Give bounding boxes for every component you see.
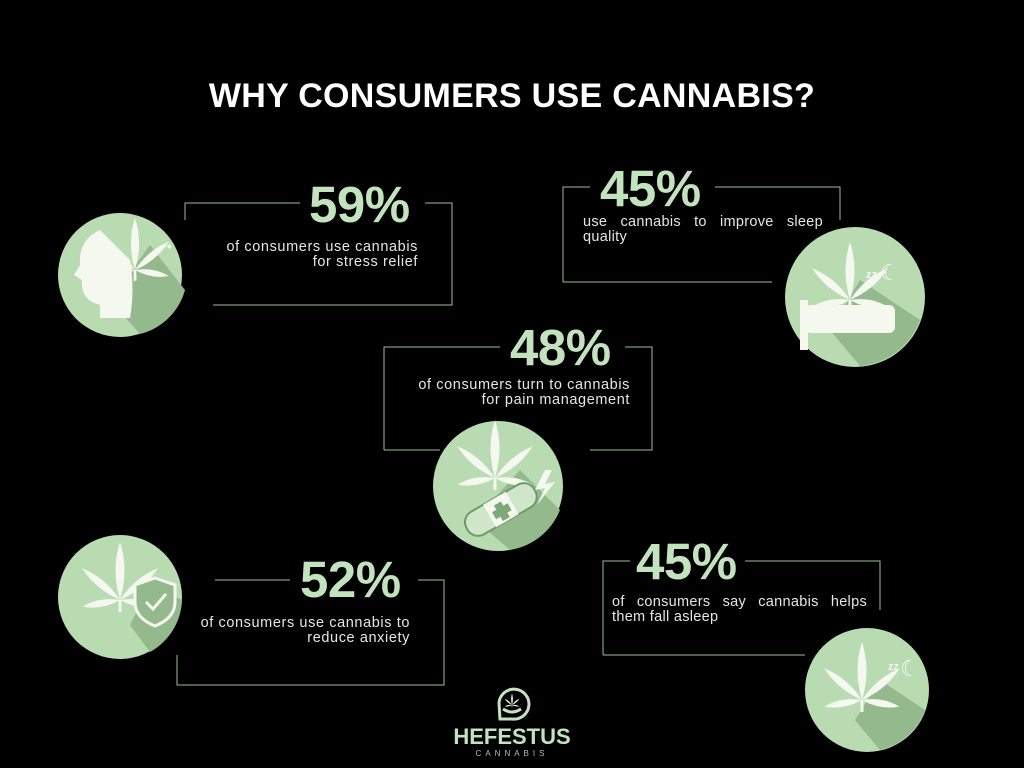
text: pain management [418, 377, 630, 408]
icon: stress relief circle: ✦ [95, 237, 108, 254]
icon: sleep circle: ☾ [880, 260, 900, 285]
text: fall asleep: of consumers say cannabis helps them fall asleep [612, 594, 867, 625]
text: pain management: of consumers turn to cannabis [418, 377, 630, 393]
logo: CANNABIS [476, 749, 548, 758]
stat 45% sleep quality: 45% [600, 160, 701, 217]
logo: HEFESTUS [453, 724, 571, 749]
text: stress relief: for stress relief [313, 254, 418, 270]
icon: sleep circle: zz [866, 269, 878, 281]
stat 59%: 59% [309, 176, 410, 233]
text: stress relief: of consumers use cannabis [226, 239, 418, 255]
text: anxiety: reduce anxiety [307, 630, 410, 646]
stat 52%: 52% [300, 551, 401, 608]
text: pain management: for pain management [482, 392, 630, 408]
icon: stress relief circle: ✦ [165, 242, 173, 253]
text: anxiety: of consumers use cannabis to [201, 615, 410, 631]
icon: fall asleep circle: zz [888, 661, 900, 673]
text: stress relief [226, 239, 418, 270]
text: sleep quality: use cannabis to improve sleep quality [583, 214, 823, 245]
text: anxiety [201, 615, 410, 646]
stat 45% fall asleep: 45% [636, 533, 737, 590]
stat 48%: 48% [510, 319, 611, 376]
icon: fall asleep circle: ☾ [900, 656, 920, 681]
logo [453, 688, 571, 758]
title: WHY CONSUMERS USE CANNABIS? [209, 77, 815, 115]
